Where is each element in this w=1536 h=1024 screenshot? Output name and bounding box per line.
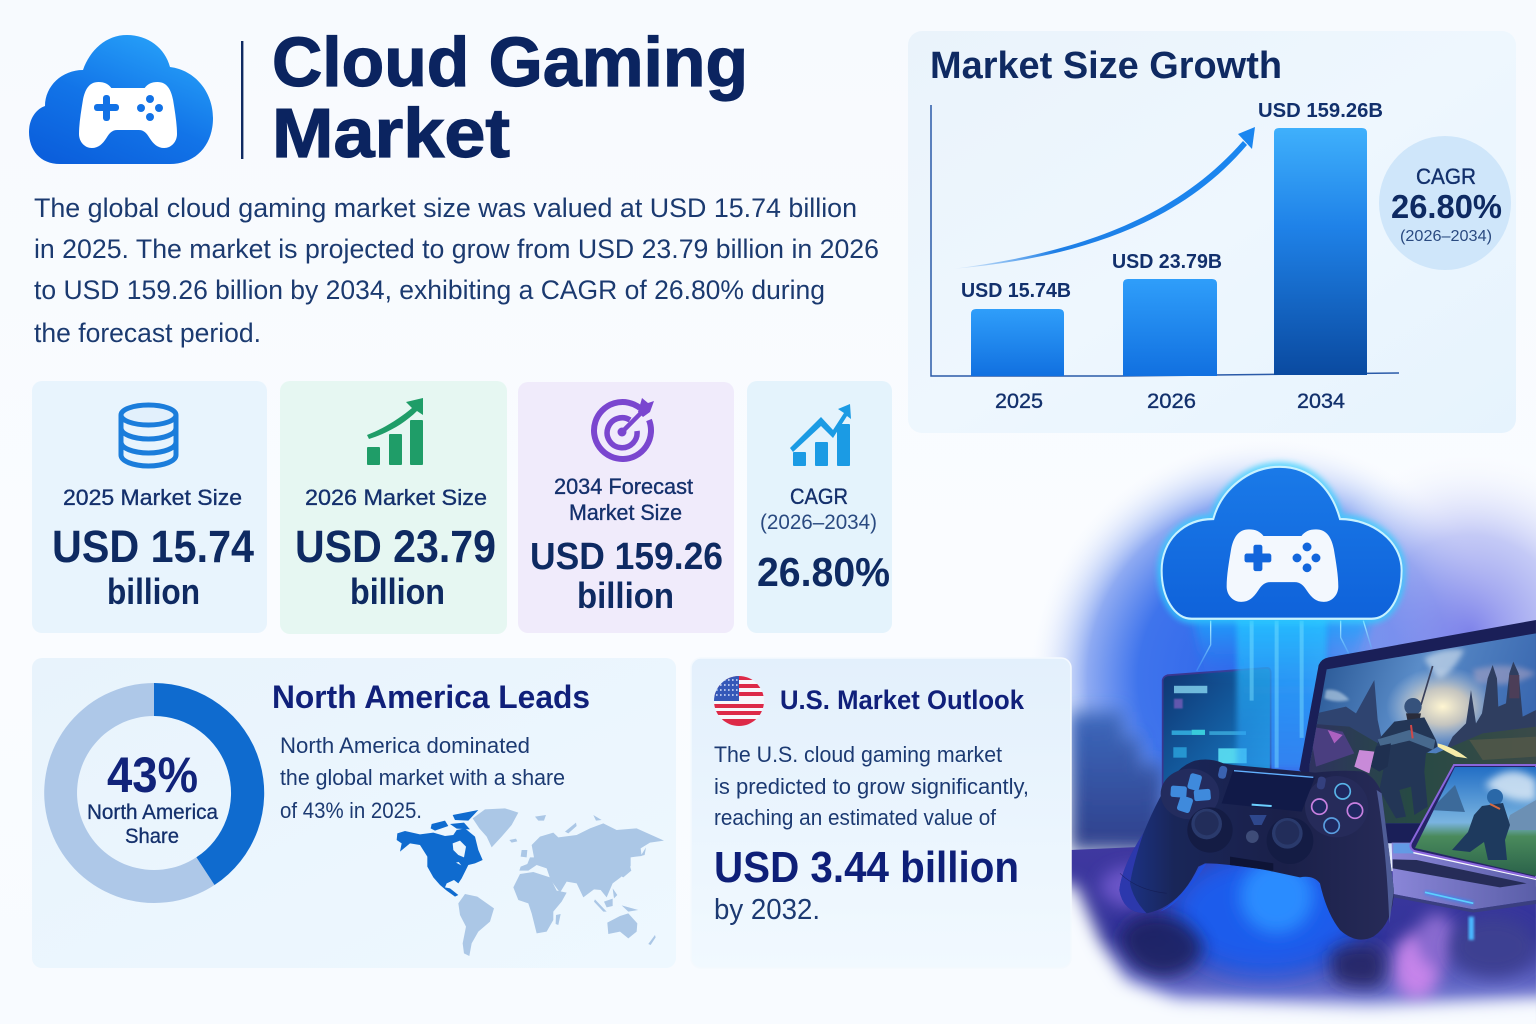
stat card: 2034 forecast: 2034 Forecast	[554, 474, 693, 499]
game controller	[1119, 759, 1394, 940]
panel text: reaching an estimated value of	[714, 805, 997, 830]
panel text: is predicted to grow significantly,	[714, 774, 1029, 799]
panel text: North America dominated	[280, 733, 530, 758]
intro paragraph: in 2025. The market is projected to grow from USD 23.79 billion in 2026	[34, 234, 879, 264]
distant mountains	[1313, 680, 1383, 743]
US value: USD 3.44 billion	[714, 843, 1019, 892]
bar 2026	[1112, 251, 1222, 413]
stat card: CAGR	[747, 381, 892, 633]
bar 2034: 2034	[1297, 390, 1345, 413]
glowing cloud icon	[1162, 467, 1402, 619]
bar 2025: USD 15.74B	[961, 280, 1071, 302]
CAGR badge: 26.80%	[1391, 188, 1502, 225]
data beams	[1193, 619, 1372, 768]
by 2032: by 2032.	[714, 894, 820, 926]
chart heading: Market Size Growth	[930, 45, 1282, 87]
stat card: 2026 market size	[280, 381, 507, 634]
bar 2026: 2026	[1147, 390, 1196, 413]
panel: U.S. Market Outlook	[691, 658, 1071, 968]
panel text: of 43% in 2025.	[280, 798, 422, 823]
bar 2034	[1258, 100, 1383, 413]
left button cluster	[1161, 769, 1219, 819]
stat card: 2026 market size: 2026 Market Size	[305, 485, 487, 510]
icon: US flag	[714, 676, 764, 726]
stat card: 2025 market size: 2025 Market Size	[63, 485, 242, 510]
tablet	[1410, 765, 1536, 880]
panel heading: U.S. Market Outlook	[780, 685, 1025, 715]
panel text	[714, 742, 1029, 830]
title	[272, 23, 748, 172]
panel text	[280, 733, 565, 823]
bar 2026: USD 23.79B	[1112, 251, 1222, 273]
CAGR badge: CAGR	[1416, 164, 1476, 189]
donut chart: Share	[125, 825, 179, 848]
panel: market size growth chart	[908, 31, 1516, 433]
stat card: 2025 market size: USD 15.74	[52, 521, 254, 572]
stat card: CAGR: CAGR	[790, 484, 848, 509]
icon: database	[121, 405, 176, 466]
bar 2034: USD 159.26B	[1258, 100, 1383, 122]
stat card: 2034 forecast: billion	[577, 575, 674, 616]
left monitor	[1163, 668, 1271, 794]
bar 2025	[961, 280, 1071, 413]
title: Cloud Gaming	[272, 23, 748, 101]
stat card: 2026 market size: billion	[350, 571, 445, 612]
donut chart	[44, 683, 264, 903]
panel text: The U.S. cloud gaming market	[714, 742, 1002, 767]
hero illustration: cloud gaming devices	[1045, 454, 1536, 1017]
intro paragraph: the forecast period.	[34, 318, 261, 348]
CAGR badge	[1379, 136, 1511, 270]
world map	[397, 808, 664, 956]
laptop base and keyboard	[1392, 843, 1536, 913]
stat card: 2034 forecast: Market Size	[569, 500, 682, 525]
donut chart: 43%	[107, 747, 198, 803]
intro paragraph	[34, 193, 879, 348]
icon: green growth chart	[367, 398, 423, 465]
bar 2025: 2025	[995, 390, 1043, 413]
stat card: CAGR: 26.80%	[757, 549, 890, 595]
panel text: the global market with a share	[280, 765, 565, 790]
stat card: 2026 market size: USD 23.79	[295, 521, 496, 572]
CAGR badge: (2026–2034)	[1400, 228, 1492, 245]
stat card: 2034 forecast: USD 159.26	[530, 536, 723, 578]
icon: target with arrow	[594, 398, 654, 459]
stat card: 2025 market size: billion	[107, 571, 200, 612]
panel heading: North America Leads	[272, 679, 590, 715]
stat card: CAGR: (2026–2034)	[760, 511, 877, 534]
intro paragraph: The global cloud gaming market size was valued at USD 15.74 billion	[34, 193, 857, 223]
panel: North America Leads	[32, 658, 676, 968]
touchpad	[1222, 770, 1315, 812]
stat card: 2034 forecast	[518, 382, 734, 633]
soldier on laptop screen	[1371, 666, 1438, 818]
desk surface	[1072, 847, 1536, 1017]
thumbsticks	[1187, 807, 1313, 864]
ground	[1306, 723, 1536, 827]
intro paragraph: to USD 159.26 billion by 2034, exhibiting a CAGR of 26.80% during	[34, 275, 825, 305]
icon: CAGR growth chart	[790, 404, 851, 466]
title: Market	[272, 94, 510, 172]
growth arrow	[952, 127, 1255, 269]
right button cluster	[1305, 776, 1368, 837]
logo: cloud with gamepad	[29, 35, 213, 164]
stat card: 2025 market size	[32, 381, 267, 633]
castle towers	[1439, 662, 1536, 763]
laptop	[1299, 620, 1536, 843]
donut chart: North America	[87, 801, 218, 824]
